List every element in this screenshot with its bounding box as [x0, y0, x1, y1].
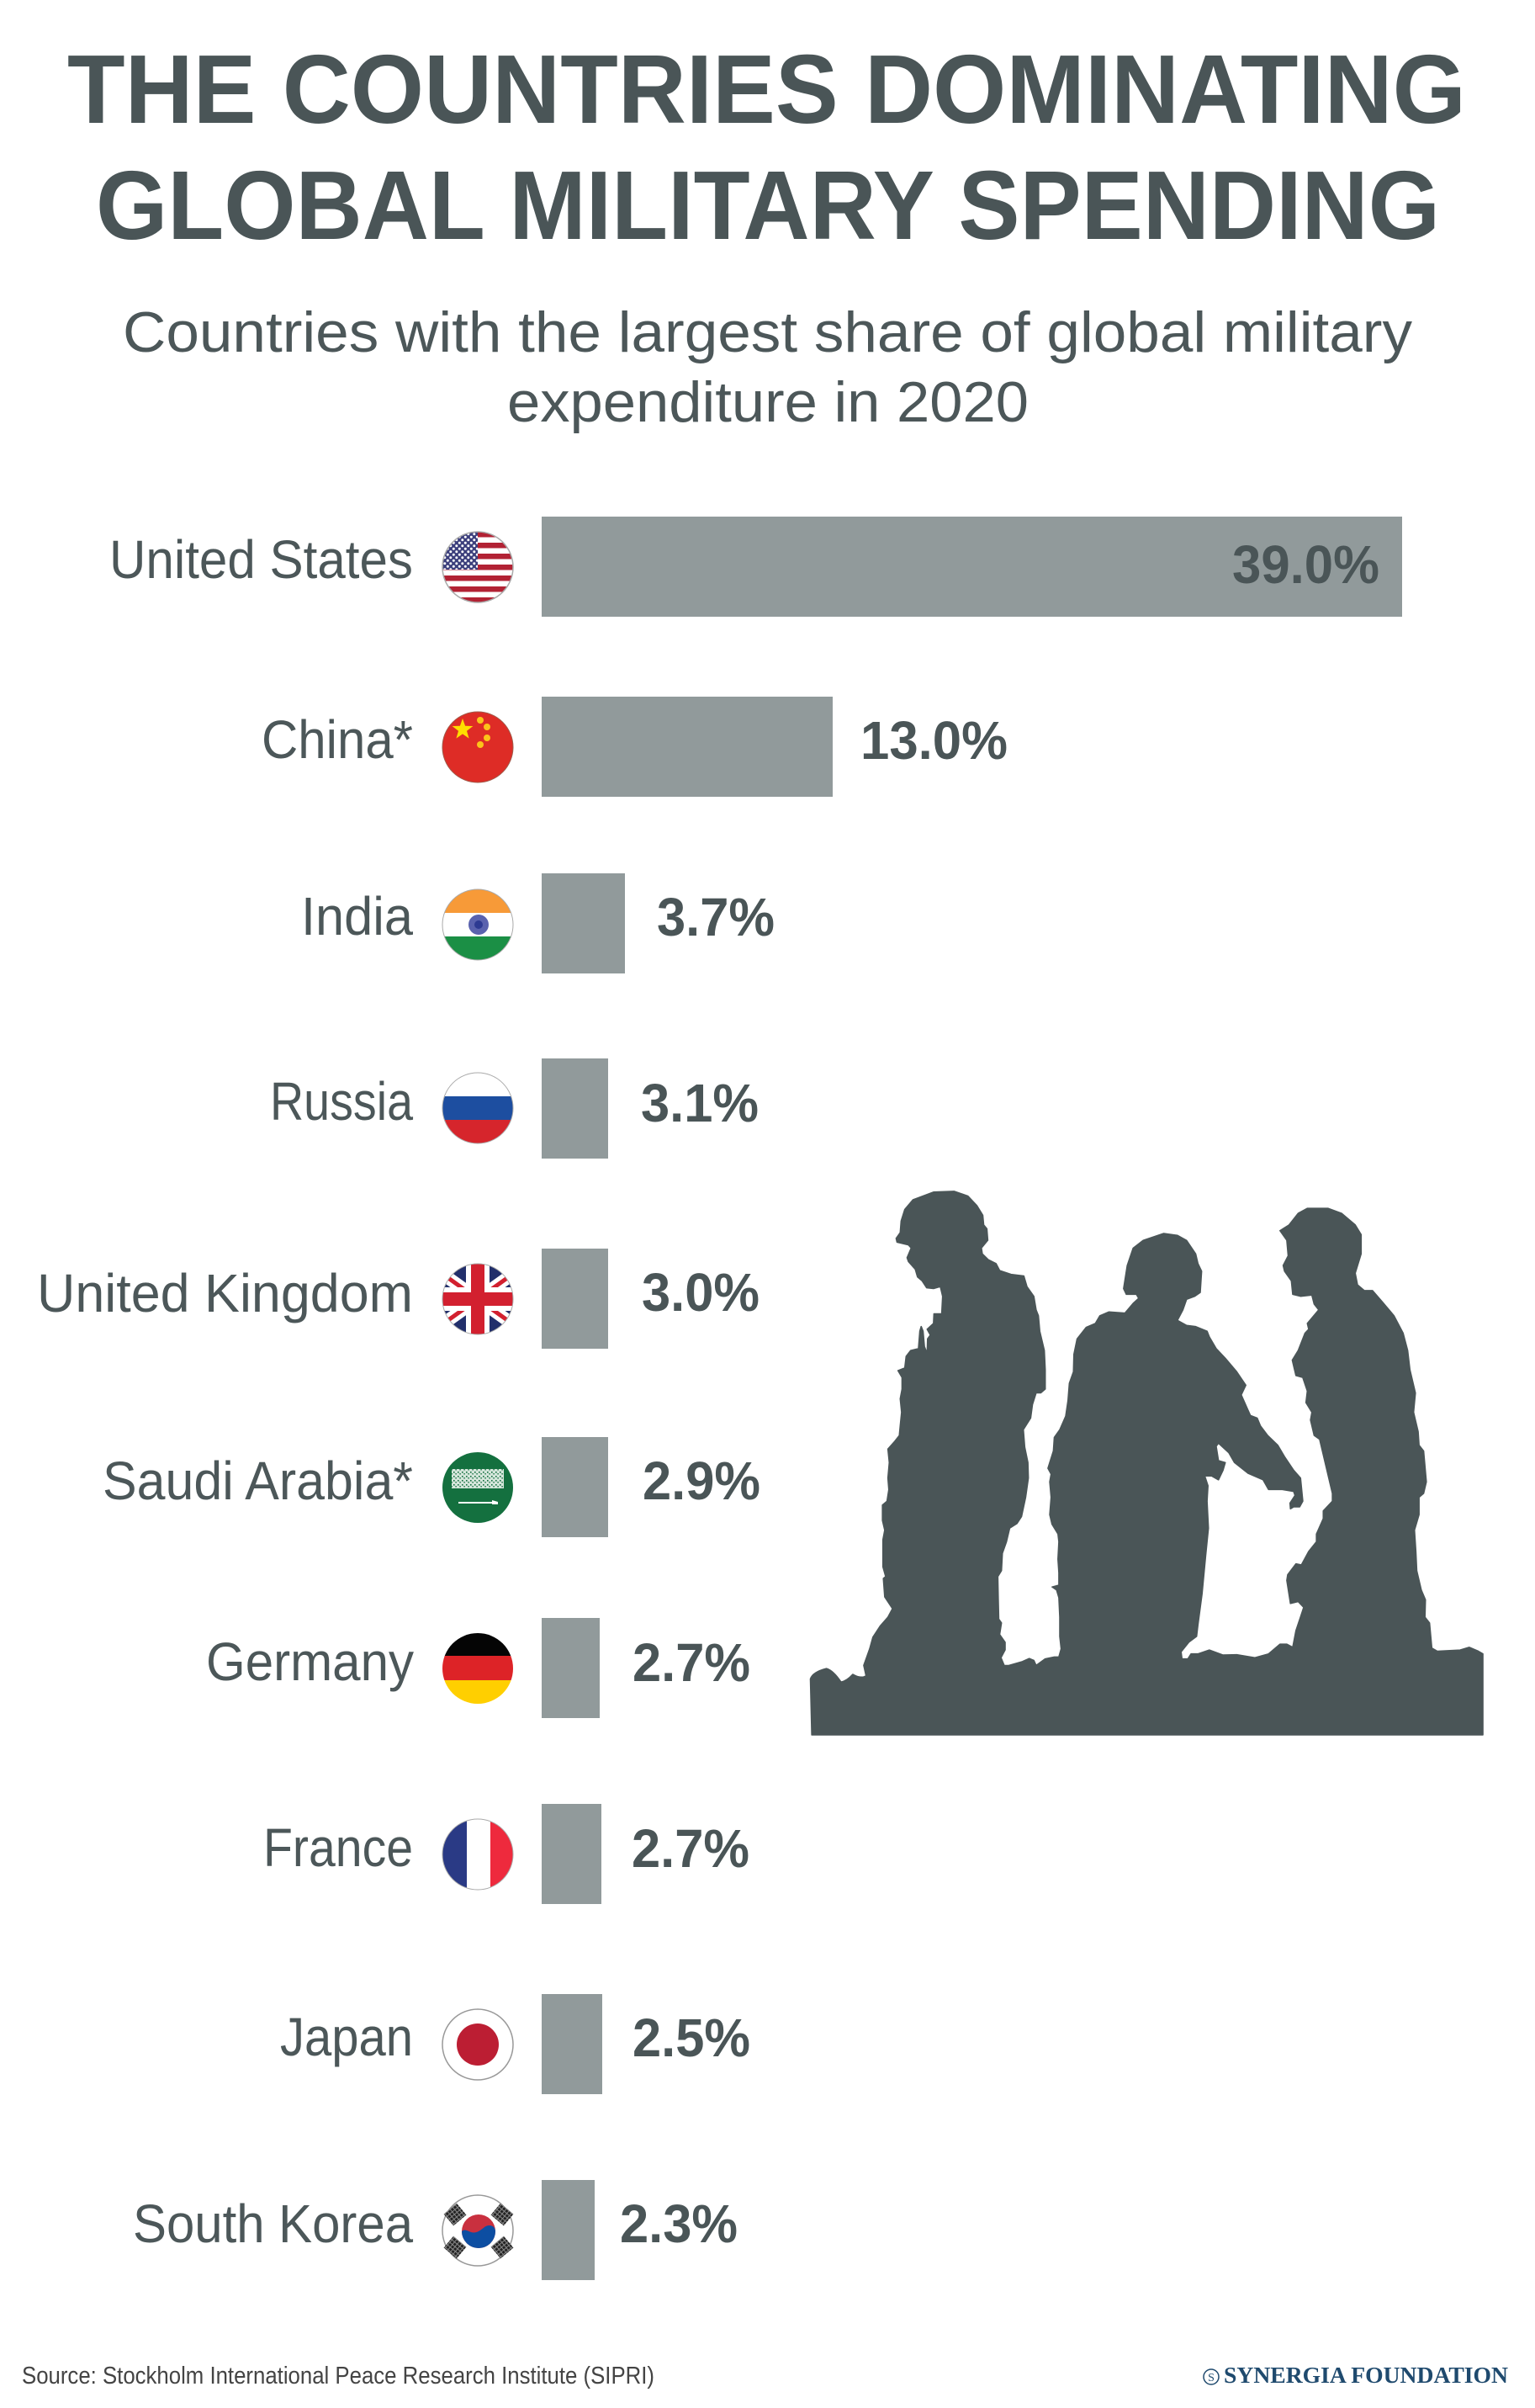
- value: 3.7%: 3.7%: [657, 887, 775, 947]
- bar: Japan: [542, 1994, 602, 2094]
- row: Russia: [270, 1058, 759, 1159]
- bar: United Kingdom: [542, 1249, 608, 1349]
- flag: China: [442, 712, 513, 782]
- value: 3.1%: 3.1%: [641, 1073, 759, 1133]
- row: China: [262, 697, 1008, 797]
- value: 3.0%: 3.0%: [642, 1262, 760, 1323]
- subtitle: Countries with the largest share of global military: [123, 300, 1412, 364]
- value: 13.0%: 13.0%: [860, 710, 1008, 771]
- bar: South Korea: [542, 2180, 595, 2280]
- illustration: soldiers silhouette: [811, 1191, 1483, 1735]
- value: 2.7%: 2.7%: [632, 1818, 749, 1879]
- flag: United Kingdom: [442, 1264, 513, 1334]
- bar: India: [542, 873, 625, 973]
- value: 2.9%: 2.9%: [643, 1451, 760, 1511]
- flag: Saudi Arabia: [442, 1452, 514, 1523]
- label: South Korea: South Korea: [133, 2193, 413, 2254]
- icon: S circle: S: [1208, 2372, 1215, 2384]
- row: South Korea: [133, 2180, 738, 2280]
- value: 39.0%: 39.0%: [1232, 534, 1379, 595]
- subtitle: expenditure in 2020: [507, 370, 1029, 434]
- icon: S circle: [1204, 2369, 1219, 2384]
- title: [67, 34, 1466, 260]
- label: India: India: [301, 886, 413, 947]
- label: Germany: Germany: [206, 1631, 414, 1692]
- label: United Kingdom: United Kingdom: [37, 1263, 413, 1323]
- label: France: France: [263, 1817, 413, 1878]
- bar: Germany: [542, 1618, 600, 1718]
- bar: Saudi Arabia: [542, 1437, 608, 1537]
- label: United States: United States: [109, 529, 413, 590]
- bar: China: [542, 697, 833, 797]
- title: GLOBAL MILITARY SPENDING: [96, 151, 1440, 260]
- bar: Russia: [542, 1058, 608, 1159]
- bar: United States: [542, 517, 1402, 617]
- logo: Synergia Foundation: [1204, 2363, 1509, 2388]
- row: United States: [109, 517, 1402, 617]
- row: Japan: [280, 1994, 750, 2094]
- flag: South Korea: [442, 2195, 513, 2266]
- value: 2.5%: 2.5%: [633, 2008, 750, 2068]
- label: Saudi Arabia: Saudi Arabia*: [103, 1451, 413, 1511]
- title: THE COUNTRIES DOMINATING: [67, 34, 1466, 144]
- flag: India: [442, 889, 513, 960]
- flag: Japan: [442, 2009, 513, 2080]
- flag: France: [442, 1819, 513, 1890]
- row: France: [263, 1804, 749, 1904]
- value: 2.7%: 2.7%: [633, 1632, 750, 1693]
- label: China: China*: [262, 709, 413, 770]
- row: United Kingdom: [37, 1249, 760, 1349]
- bar: France: [542, 1804, 601, 1904]
- source note: Source: Stockholm International Peace Research Institute (SIPRI): [22, 2363, 654, 2389]
- value: 2.3%: 2.3%: [620, 2193, 738, 2254]
- flag: United States: [442, 532, 513, 602]
- flag: Russia: [442, 1073, 513, 1143]
- row: India: [301, 873, 775, 973]
- wordmark: SYNERGIA FOUNDATION: [1224, 2363, 1509, 2388]
- row: Germany: [206, 1618, 750, 1718]
- subtitle: [123, 300, 1412, 434]
- label: Japan: Japan: [280, 2007, 413, 2067]
- label: Russia: Russia: [270, 1071, 413, 1132]
- row: Saudi Arabia: [103, 1437, 760, 1537]
- flag: Germany: [442, 1633, 513, 1704]
